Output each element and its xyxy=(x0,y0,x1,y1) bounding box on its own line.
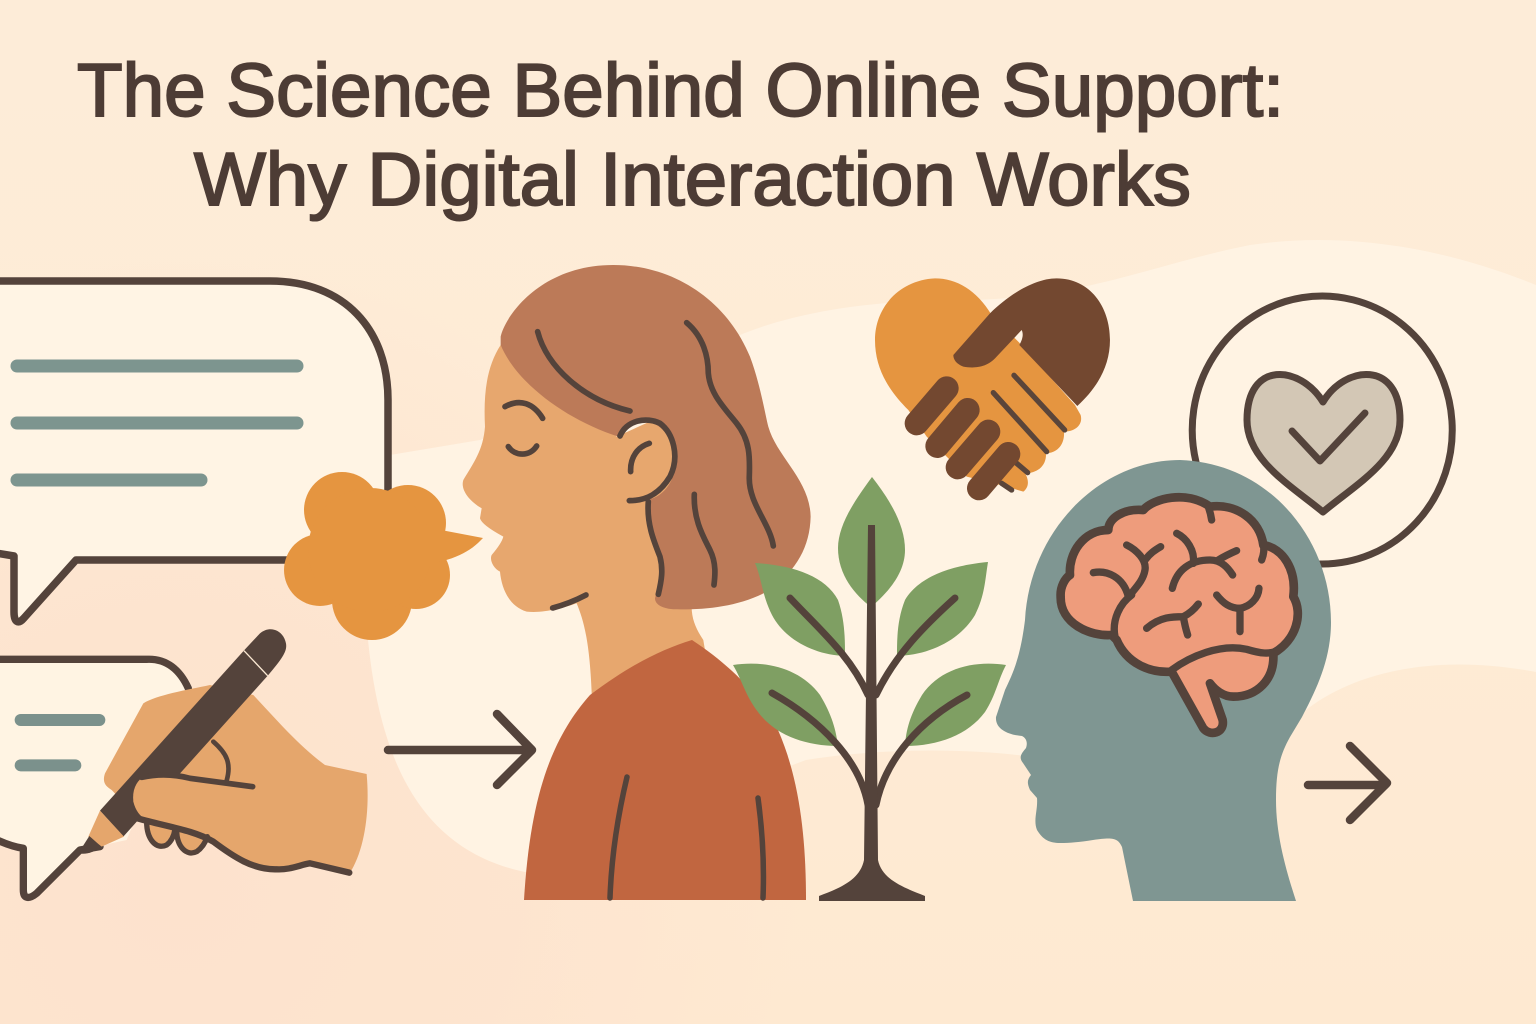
icon: handshake heart xyxy=(875,278,1110,492)
person: hair xyxy=(501,265,811,609)
icon: brain xyxy=(1061,497,1298,733)
person speaking xyxy=(463,265,811,900)
icon: fingers xyxy=(147,822,207,853)
small speech bubble with writing hand xyxy=(0,629,368,897)
bubble text lines xyxy=(17,366,297,480)
title: Why Digital Interaction Works xyxy=(194,137,1191,221)
icon: growing plant xyxy=(733,477,1006,901)
icon: pen xyxy=(78,629,286,854)
arrow: writing to person xyxy=(388,714,532,785)
title xyxy=(77,48,1284,221)
large speech bubble xyxy=(0,281,388,622)
arrow: onward from head xyxy=(1308,746,1387,820)
icon: heart with check in circle xyxy=(1192,296,1452,564)
title: The Science Behind Online Support: xyxy=(77,48,1284,132)
icon: hand xyxy=(104,685,368,870)
person: shirt xyxy=(524,640,806,900)
silhouette head xyxy=(996,460,1331,901)
icon: orange speech cloud xyxy=(284,472,483,640)
person: shirt fold lines xyxy=(610,777,763,898)
icon: thumb xyxy=(133,774,253,833)
person: facial and hair lines xyxy=(505,323,773,608)
person: face and neck xyxy=(463,345,707,700)
